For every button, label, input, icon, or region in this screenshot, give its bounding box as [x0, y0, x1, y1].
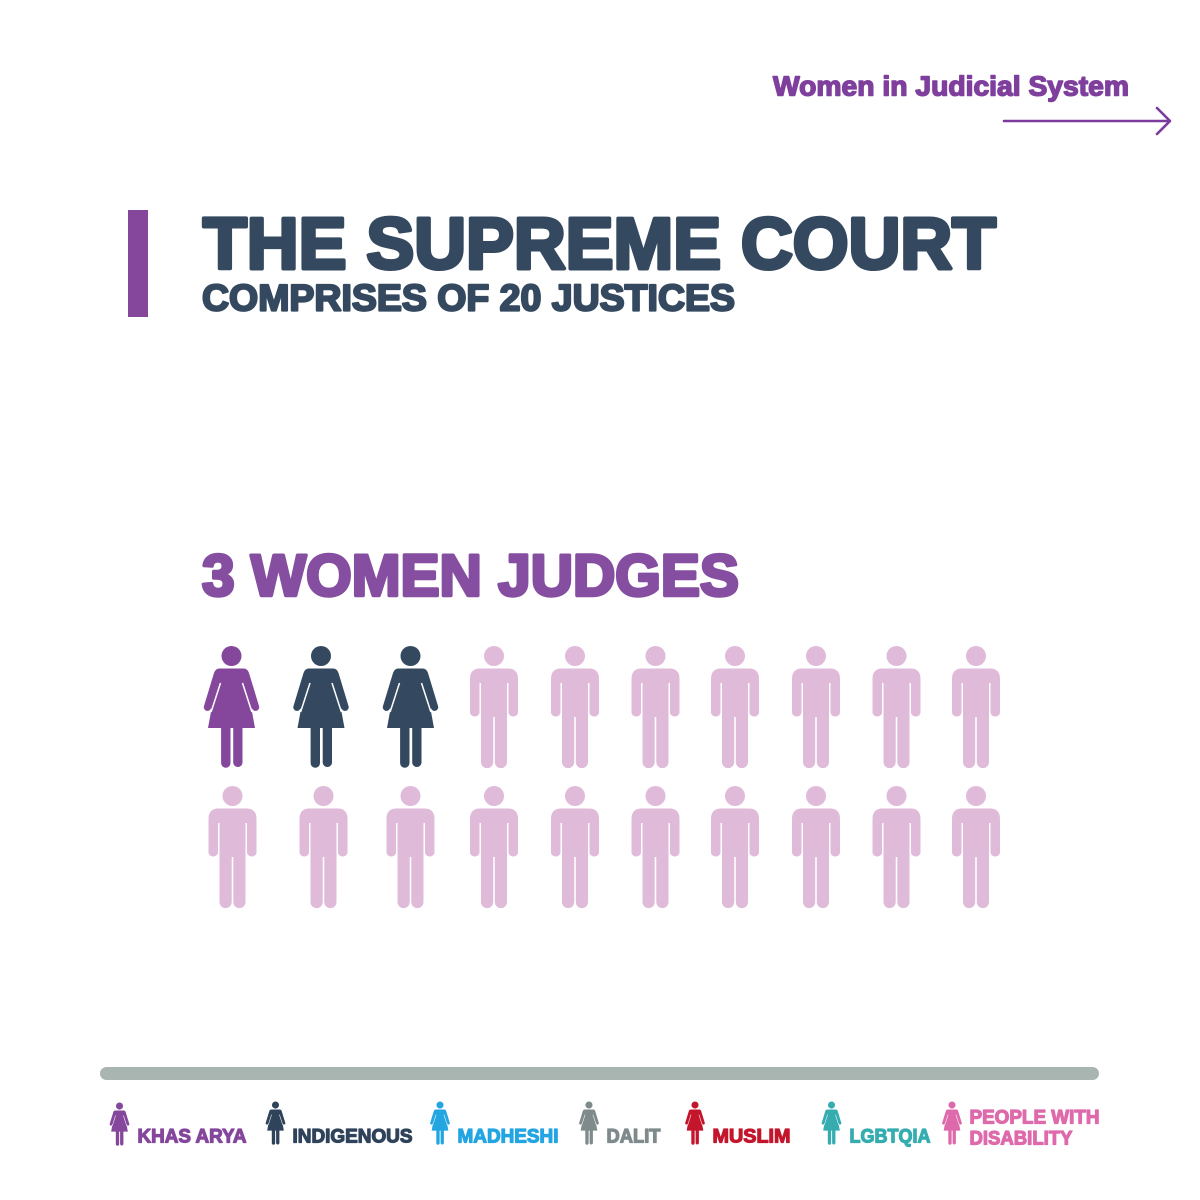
icon: woman judge khas arya — [204, 646, 259, 768]
arrow — [1004, 108, 1170, 134]
legend: khas arya: KHAS ARYA — [138, 1126, 246, 1148]
legend: lgbtqia — [822, 1102, 930, 1148]
row 1 of justices — [204, 646, 1000, 768]
pictogram: 20 justices — [204, 646, 1000, 908]
legend: muslim: MUSLIM — [712, 1126, 790, 1148]
row 2 of justices — [208, 786, 1000, 908]
legend: people with disability: DISABILITY — [970, 1128, 1072, 1150]
title: THE SUPREME COURT — [203, 204, 996, 284]
icon: woman judge indigenous — [383, 646, 438, 768]
icon: woman judge indigenous — [293, 646, 349, 768]
legend divider — [100, 1067, 1099, 1080]
heading: women judges: 3 WOMEN JUDGES — [202, 544, 739, 608]
legend: madheshi — [430, 1102, 558, 1148]
section label: Women in Judicial System — [773, 70, 1129, 102]
icons: men row 1 — [470, 646, 1000, 768]
legend: lgbtqia: LGBTQIA — [850, 1126, 930, 1148]
accent bar — [128, 210, 148, 317]
legend: people with disability: PEOPLE WITH — [970, 1106, 1100, 1128]
legend: khas arya — [110, 1102, 246, 1148]
legend — [110, 1102, 1100, 1150]
legend: people with disability — [942, 1102, 1100, 1150]
legend: dalit — [579, 1102, 661, 1148]
legend: muslim — [685, 1102, 790, 1148]
legend: madheshi: MADHESHI — [458, 1126, 558, 1148]
legend: indigenous: INDIGENOUS — [292, 1126, 412, 1148]
legend: dalit: DALIT — [606, 1126, 661, 1148]
legend: indigenous — [266, 1102, 412, 1148]
subtitle: COMPRISES OF 20 JUSTICES — [202, 278, 735, 318]
